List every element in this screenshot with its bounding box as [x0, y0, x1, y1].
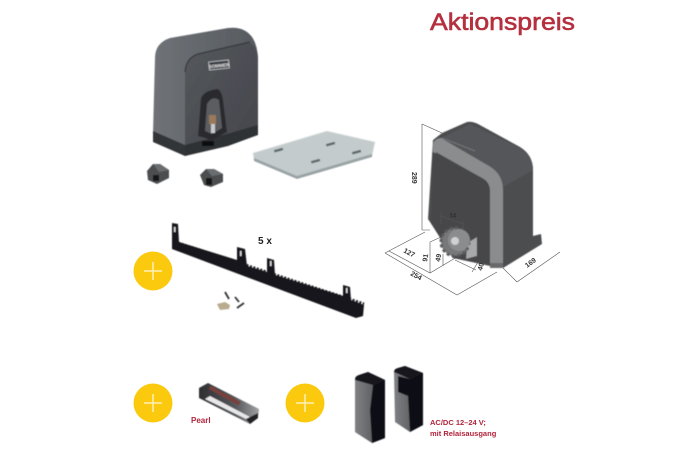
technical dimension drawing	[385, 122, 560, 295]
dimension labels: 127	[402, 248, 416, 259]
label: 5 x: 5 x	[258, 236, 272, 247]
dimension labels: 254	[409, 271, 423, 282]
dimension labels: f4	[450, 213, 456, 220]
remote control	[199, 383, 259, 424]
photocell right	[394, 366, 423, 432]
dimension labels: 169	[524, 257, 538, 270]
dimension labels: 40	[477, 262, 486, 272]
motor body drawing	[428, 122, 542, 268]
mounting plate	[253, 131, 375, 179]
brand plate: SOMMER	[209, 62, 230, 69]
gear and pinion	[441, 228, 477, 259]
dimension labels: 49	[435, 253, 443, 262]
sensor specification text: mit Relaisausgang	[430, 429, 497, 438]
dimension lines	[385, 124, 560, 295]
motor unit photo	[153, 28, 258, 156]
plus badge: sensors	[286, 384, 324, 422]
screws and nut	[217, 292, 244, 310]
plus badge: rack	[134, 252, 172, 290]
small bracket right	[200, 169, 223, 187]
plus badge: remote	[134, 384, 172, 422]
dimension labels: 289	[410, 172, 417, 184]
photocell left	[355, 372, 385, 443]
title: Aktionspreis: Aktionspreis	[430, 9, 575, 36]
small bracket left	[147, 164, 169, 184]
toothed gear rack	[172, 223, 364, 318]
dimension labels: 91	[422, 253, 430, 262]
label: Pearl: Pearl	[191, 416, 211, 425]
dimension labels	[402, 172, 538, 282]
sensor specification text: AC/DC 12–24 V;	[430, 418, 486, 427]
